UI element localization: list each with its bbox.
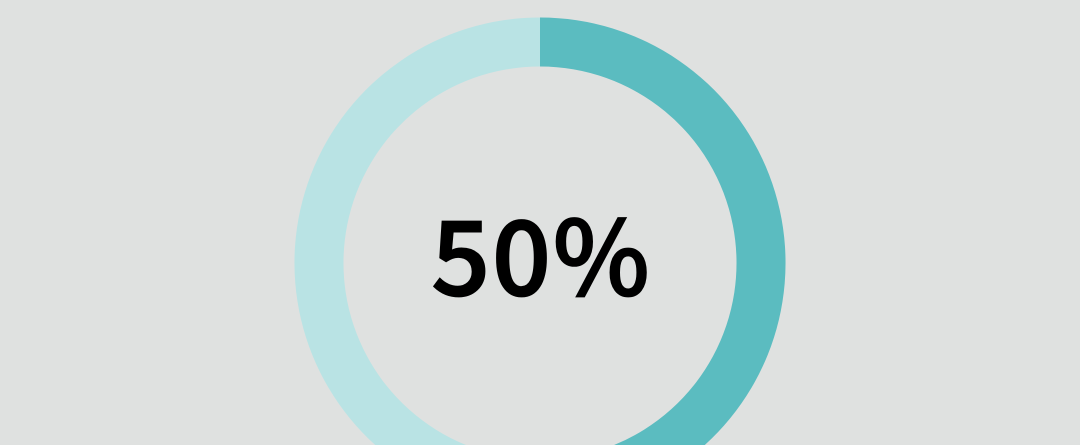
donut segment: 50 percent [540, 17, 786, 445]
donut track: remaining share [294, 17, 540, 445]
percentage label: 50% [431, 176, 652, 325]
